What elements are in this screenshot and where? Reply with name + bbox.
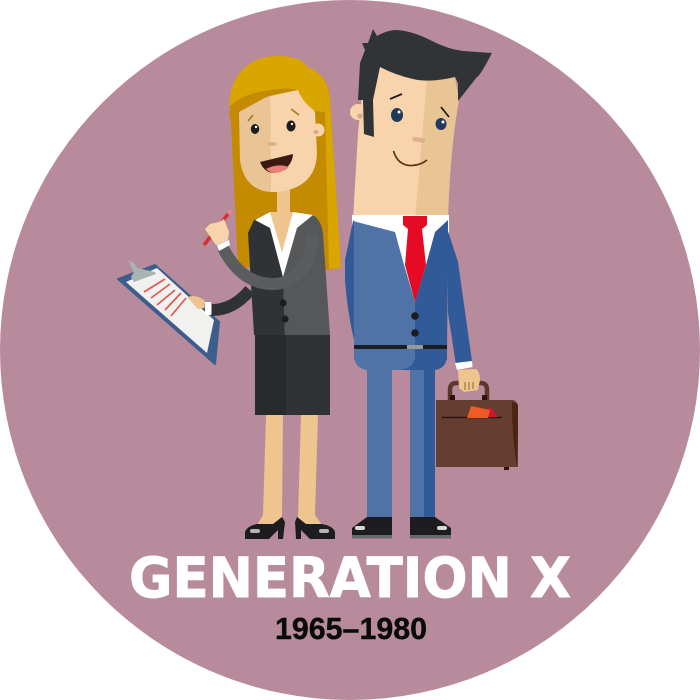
man legs [367, 365, 435, 518]
briefcase [436, 383, 518, 470]
woman face [239, 88, 324, 192]
pencil [204, 210, 232, 245]
woman skirt [255, 334, 330, 415]
woman jacket [248, 214, 330, 335]
man hand [458, 369, 480, 392]
clipboard [118, 260, 219, 364]
illustration: man with briefcase [345, 29, 518, 538]
woman hair back [230, 56, 341, 270]
man tie [403, 216, 427, 302]
woman neck [270, 185, 293, 252]
man hips [354, 340, 447, 370]
man shirt [352, 215, 449, 302]
woman collar [255, 212, 313, 277]
man shirt cuff [455, 361, 472, 370]
woman lower arm and hand [187, 290, 250, 315]
man buttons [411, 312, 419, 337]
man belt [354, 345, 447, 349]
man sleeve [447, 228, 472, 365]
woman hand [205, 219, 229, 245]
title: GENERATION X [129, 546, 571, 610]
woman shoes [245, 517, 335, 539]
woman legs [257, 415, 322, 525]
man suit jacket [345, 220, 448, 360]
man hair [358, 29, 492, 137]
woman fringe [229, 56, 330, 112]
woman hairline band [229, 84, 300, 128]
man shoes [352, 517, 451, 538]
woman raised arm [217, 238, 312, 284]
man face [350, 67, 459, 220]
illustration: woman with clipboard [118, 56, 341, 539]
woman jacket buttons [279, 299, 289, 323]
date range: 1965–1980 [275, 611, 427, 646]
